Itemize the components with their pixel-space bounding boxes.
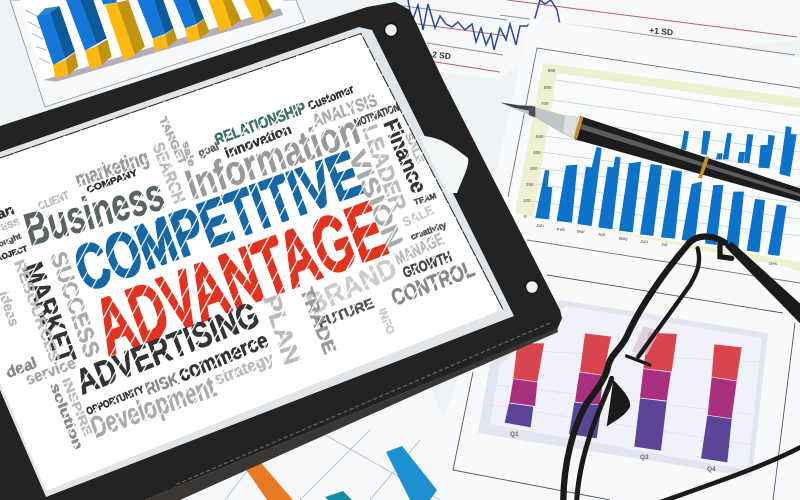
lens tint [632, 327, 660, 355]
supporting keywords: service [24, 355, 78, 389]
x axis labels: Feb [557, 227, 565, 232]
lower case edge [145, 328, 558, 500]
supporting keywords: SUCCESS [45, 248, 106, 361]
blue bars [535, 126, 797, 256]
hinge [720, 243, 732, 258]
nose pad [607, 380, 630, 427]
y axis labels [523, 68, 556, 219]
y axis labels: 800 [544, 85, 552, 90]
y axis labels: 200 [526, 182, 534, 187]
supporting keywords: solution [47, 381, 86, 452]
x axis labels: Mar [577, 229, 585, 234]
tablet screen edge [0, 34, 503, 310]
quarter labels [510, 431, 716, 473]
supporting keywords: FUTURE [315, 295, 376, 331]
right temple [725, 242, 800, 325]
supporting keywords: GROWTH [401, 248, 454, 282]
supporting keywords [0, 82, 478, 452]
quarter labels: Q1 [510, 431, 519, 438]
supporting keywords: sale [179, 140, 197, 168]
supporting keywords: ADVERTISING [70, 294, 265, 402]
supporting keywords: strategy [212, 349, 277, 389]
supporting keywords: innovation [222, 121, 293, 161]
supporting keywords: COMPANY [85, 168, 139, 195]
supporting keywords: INFO [375, 307, 397, 337]
supporting keywords: CONTROL [387, 255, 478, 311]
supporting keywords: Development [86, 370, 220, 445]
blue bar [386, 446, 437, 500]
y axis labels: 500 [536, 134, 544, 139]
tablet screen [0, 34, 503, 491]
supporting keywords: marketing [72, 146, 152, 192]
inner rim [638, 248, 699, 357]
y axis labels: 300 [530, 166, 538, 171]
supporting keywords: SALE [400, 202, 436, 230]
upper rim and bridge [563, 237, 725, 500]
chart panel [478, 300, 768, 477]
quarter labels: Q3 [640, 454, 649, 461]
chart frame [508, 48, 800, 197]
y axis labels: 900 [548, 68, 556, 73]
y axis labels: 400 [533, 150, 541, 155]
supporting keywords: CLIENT [37, 190, 71, 213]
strap holes [384, 24, 538, 294]
blue line series [408, 0, 562, 50]
x axis labels [536, 223, 778, 266]
y axis labels: 700 [541, 101, 549, 106]
label: chart heading: I .T Avg A [684, 46, 719, 59]
paper frame lines [453, 275, 795, 500]
distressed stripe texture [0, 30, 510, 495]
supporting keywords: creativity [409, 220, 447, 242]
label: +1 SD: +1 SD [649, 25, 674, 37]
y axis labels: 0 [524, 214, 527, 219]
supporting keywords: MOTIVATION [353, 102, 401, 130]
supporting keywords: commerce [174, 327, 272, 387]
supporting keywords: Customer [306, 82, 356, 113]
x axis labels: Jan [536, 223, 544, 228]
red threshold lines [403, 0, 797, 72]
supporting keywords: ANALYSIS [310, 90, 380, 131]
supporting keywords: TARGET [156, 115, 188, 167]
y axis labels: 100 [523, 198, 531, 203]
paper: lower stacked bar chart [430, 248, 800, 500]
supporting keywords: Finance [378, 115, 432, 197]
x axis labels: Apr [598, 232, 606, 237]
orange bar [241, 456, 293, 500]
supporting keywords: MANAGE [392, 229, 447, 269]
tablet bezel [0, 27, 514, 497]
lower temple [662, 447, 800, 500]
headline: ADVANTAGE: ADVANTAGE [83, 184, 396, 372]
supporting keywords: OPPORTUNITY [85, 384, 146, 418]
tablet case [0, 2, 562, 500]
supporting keywords: VISION [342, 146, 408, 252]
x axis labels: May [619, 236, 628, 241]
teal bar [325, 491, 352, 500]
pen rings [575, 117, 707, 178]
supporting keywords: PLAN [257, 292, 305, 368]
word cloud [0, 30, 510, 495]
supporting keywords: INSPIRE [59, 376, 95, 438]
grid lines [531, 80, 800, 236]
pen [500, 102, 800, 202]
second rim stroke [577, 378, 612, 500]
x axis labels: Jul [661, 242, 668, 247]
paper: top left 3D bar chart [10, 0, 305, 107]
quarter labels: Q4 [707, 466, 716, 473]
supporting keywords: SALE [402, 132, 425, 166]
grid lines [491, 350, 762, 445]
supporting keywords: goal [197, 141, 221, 160]
supporting keywords: TEAM [413, 191, 438, 207]
tablet notch [419, 135, 468, 193]
label: -2 SD: -2 SD [429, 49, 451, 61]
x axis labels: Dec [769, 261, 778, 266]
stacked bars [505, 333, 742, 462]
paper: monthly blue bar chart [490, 18, 800, 300]
supporting keywords: SEARCH [148, 140, 189, 206]
supporting keywords: LEADER [357, 121, 412, 214]
grid lines [225, 415, 440, 500]
supporting keywords: RISK [143, 369, 182, 399]
supporting keywords: BRAND [302, 252, 402, 321]
nose tip [627, 356, 650, 365]
stitching [175, 323, 550, 485]
x axis labels: Jun [640, 239, 648, 244]
chart background [515, 63, 800, 272]
eyeglasses [563, 237, 800, 500]
supporting keywords: TRADE [296, 284, 340, 357]
chart: 3D bars [20, 0, 283, 82]
headline: COMPETITIVE: COMPETITIVE [65, 137, 369, 305]
paper: bottom centre chart [150, 385, 445, 500]
supporting keywords: deal [4, 355, 39, 382]
supporting keywords: Business [19, 168, 170, 256]
paper: top centre line chart [397, 0, 800, 80]
supporting keywords: RESOURCES [10, 258, 63, 365]
supporting keywords: MARKET [15, 258, 81, 368]
supporting keywords: RELATIONSHIP [213, 100, 309, 149]
grey threshold lines [397, 5, 795, 55]
tablet [0, 2, 562, 500]
supporting keywords: Information [180, 106, 365, 209]
